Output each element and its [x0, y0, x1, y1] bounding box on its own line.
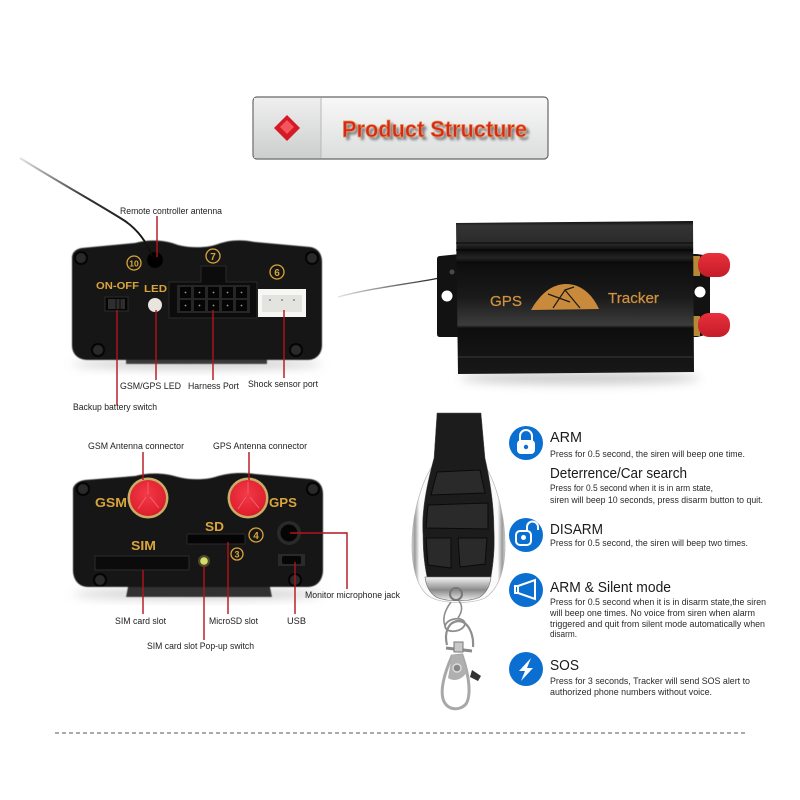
text block: SOS: Press for 3 seconds, Tracker will send SOS alert to	[550, 676, 750, 686]
circled number 6	[270, 265, 284, 279]
heading: Product Structure: Product Structure	[342, 116, 527, 142]
device rear body	[72, 240, 322, 369]
text block: SOS: SOS	[550, 657, 579, 674]
GPS text: GPS	[490, 293, 522, 310]
LED lens	[148, 298, 162, 312]
label: monitor microphone jack: Monitor microphone jack	[305, 590, 400, 600]
GSM antenna connector	[128, 478, 168, 518]
Tracker text: Tracker	[608, 290, 659, 307]
text block: ARM and Silent mode: Press for 0.5 second when it is in disarm state,the siren	[550, 597, 766, 607]
label: MicroSD slot: MicroSD slot	[209, 616, 258, 626]
circled number 4	[249, 528, 263, 542]
text block: SOS	[550, 657, 750, 697]
label: SIM card slot pop-up switch: SIM card slot Pop-up switch	[147, 641, 254, 651]
icon: red diamond	[274, 115, 300, 141]
remote antenna cable	[20, 158, 152, 256]
circled number 3: 3	[234, 550, 240, 560]
fob buttons	[426, 470, 488, 568]
globe logo	[531, 284, 599, 310]
panel: remote key fob	[412, 413, 505, 709]
MicroSD slot	[187, 534, 245, 544]
circled number 6: 6	[274, 268, 280, 279]
tracker body	[456, 221, 694, 374]
text block: DISARM: DISARM	[550, 521, 603, 538]
microphone jack	[277, 521, 301, 545]
LED text: LED	[144, 284, 167, 295]
tracker shadow	[460, 372, 700, 384]
icon: SOS lightning	[509, 652, 543, 686]
label: GSM antenna connector: GSM Antenna connector	[88, 441, 184, 451]
key ring and clasp	[444, 588, 473, 652]
title banner	[253, 97, 548, 159]
antenna connectors	[692, 253, 730, 337]
SD text: SD	[205, 519, 224, 534]
circled number 3	[231, 548, 243, 560]
text block: ARM and Silent mode: disarm.	[550, 629, 577, 639]
pop-up switch LED	[198, 555, 210, 567]
on-off switch	[105, 297, 128, 311]
text block: ARM	[550, 429, 745, 459]
harness port	[169, 266, 257, 318]
leader lines	[143, 452, 347, 640]
USB port	[278, 554, 305, 566]
label: GSM/GPS LED: GSM/GPS LED	[120, 381, 181, 391]
panel: tracker product photo	[338, 221, 730, 384]
circled number 10: 10	[129, 258, 139, 268]
text block: ARM and Silent mode: ARM & Silent mode	[550, 579, 671, 596]
fob black body	[423, 413, 494, 577]
circled number 7	[206, 249, 220, 263]
GPS antenna connector	[228, 478, 268, 518]
text block: ARM and Silent mode	[549, 579, 766, 639]
text block: DISARM: Press for 0.5 second, the siren will beep two times.	[550, 538, 748, 548]
tracker cable	[338, 277, 445, 297]
text block: Deterrence/Car search	[550, 465, 763, 505]
lobster clasp	[442, 655, 481, 709]
text block: Deterrence/Car search: siren will beep 10 seconds, press disarm button to quit.	[550, 495, 763, 505]
GSM text: GSM	[95, 495, 127, 510]
heading: Product Structure: Product Structure	[345, 119, 530, 145]
label: remote antenna: Remote controller antenna	[120, 206, 222, 216]
body ridges	[456, 243, 693, 357]
circled number 7: 7	[210, 252, 216, 263]
icon: silent mode horn	[509, 573, 543, 607]
shock sensor port	[258, 289, 306, 317]
banner icon tab	[254, 98, 321, 158]
SIM text: SIM	[131, 538, 156, 553]
label: harness port: Harness Port	[188, 381, 239, 391]
SIM card slot	[95, 556, 189, 570]
device front body	[73, 473, 323, 599]
text block: Deterrence/Car search: Deterrence/Car search	[550, 465, 687, 482]
label: SIM card slot: SIM card slot	[115, 616, 166, 626]
circled number 4: 4	[253, 531, 259, 542]
panel: rear device view	[20, 158, 322, 412]
leader lines	[117, 216, 284, 405]
label: USB: USB	[287, 616, 306, 626]
text block: ARM and Silent mode: triggered and quit from silent mode automatically when	[550, 619, 765, 629]
label: shock sensor port: Shock sensor port	[248, 379, 318, 389]
text block: ARM and Silent mode: will beep one times. No voice from siren when alarm	[549, 608, 755, 618]
circled number 10	[127, 256, 141, 270]
label: backup battery switch: Backup battery switch	[73, 402, 157, 412]
fob chrome base	[425, 577, 491, 601]
text block: SOS: authorized phone numbers without voice.	[550, 687, 712, 697]
icon: disarm open lock	[509, 518, 543, 552]
text block: DISARM	[550, 521, 748, 548]
text block: Deterrence/Car search: Press for 0.5 second when it is in arm state,	[550, 483, 713, 493]
text block: ARM: ARM	[550, 429, 582, 446]
fob chrome shell	[412, 456, 505, 602]
label: GPS antenna connector: GPS Antenna connector	[213, 441, 307, 451]
icon: arm lock	[509, 426, 543, 460]
text block: ARM: Press for 0.5 second, the siren will beep one time.	[550, 449, 745, 459]
panel: front device view	[73, 441, 400, 651]
ON-OFF text: ON-OFF	[96, 281, 139, 292]
mounting flange	[437, 254, 710, 337]
GPS text: GPS	[269, 495, 297, 510]
